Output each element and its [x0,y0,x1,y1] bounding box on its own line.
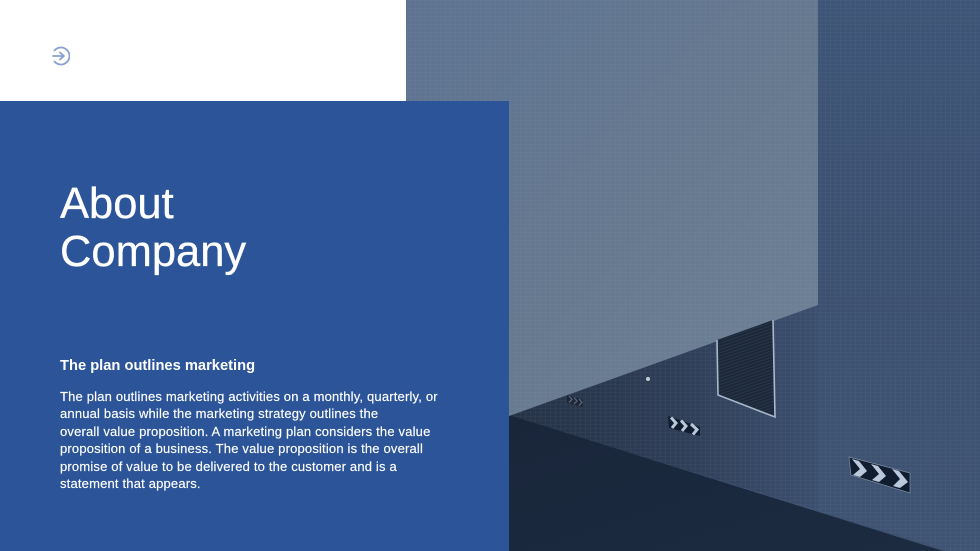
body text: proposition of a business. The value proposition is the overall [60,441,423,456]
title [60,180,246,276]
chevron sign: medium [668,416,700,436]
chevron sign: large [849,457,910,493]
lower wall [509,305,950,551]
panel: about company [0,101,509,551]
icon: circled arrow [52,46,70,66]
wall light [646,377,650,381]
body text: statement that appears. [60,476,201,491]
body text: overall value proposition. A marketing plan considers the value [60,424,430,439]
title: Company [60,228,246,276]
body text: annual basis while the marketing strategy outlines the [60,406,378,421]
subheading: The plan outlines marketing [60,358,255,374]
vent [717,320,775,417]
right wall [406,0,980,551]
upper wall [406,0,818,416]
body text: The plan outlines marketing activities on a monthly, quarterly, or [60,389,438,404]
body text: promise of value to be delivered to the customer and is a [60,459,397,474]
floor [509,415,943,551]
chevron sign: small [567,395,583,407]
upper wall texture [406,0,818,416]
right wall texture [510,0,980,551]
body text [60,389,438,491]
photo: blue tiled building wall [406,0,980,551]
title: About [60,180,174,228]
